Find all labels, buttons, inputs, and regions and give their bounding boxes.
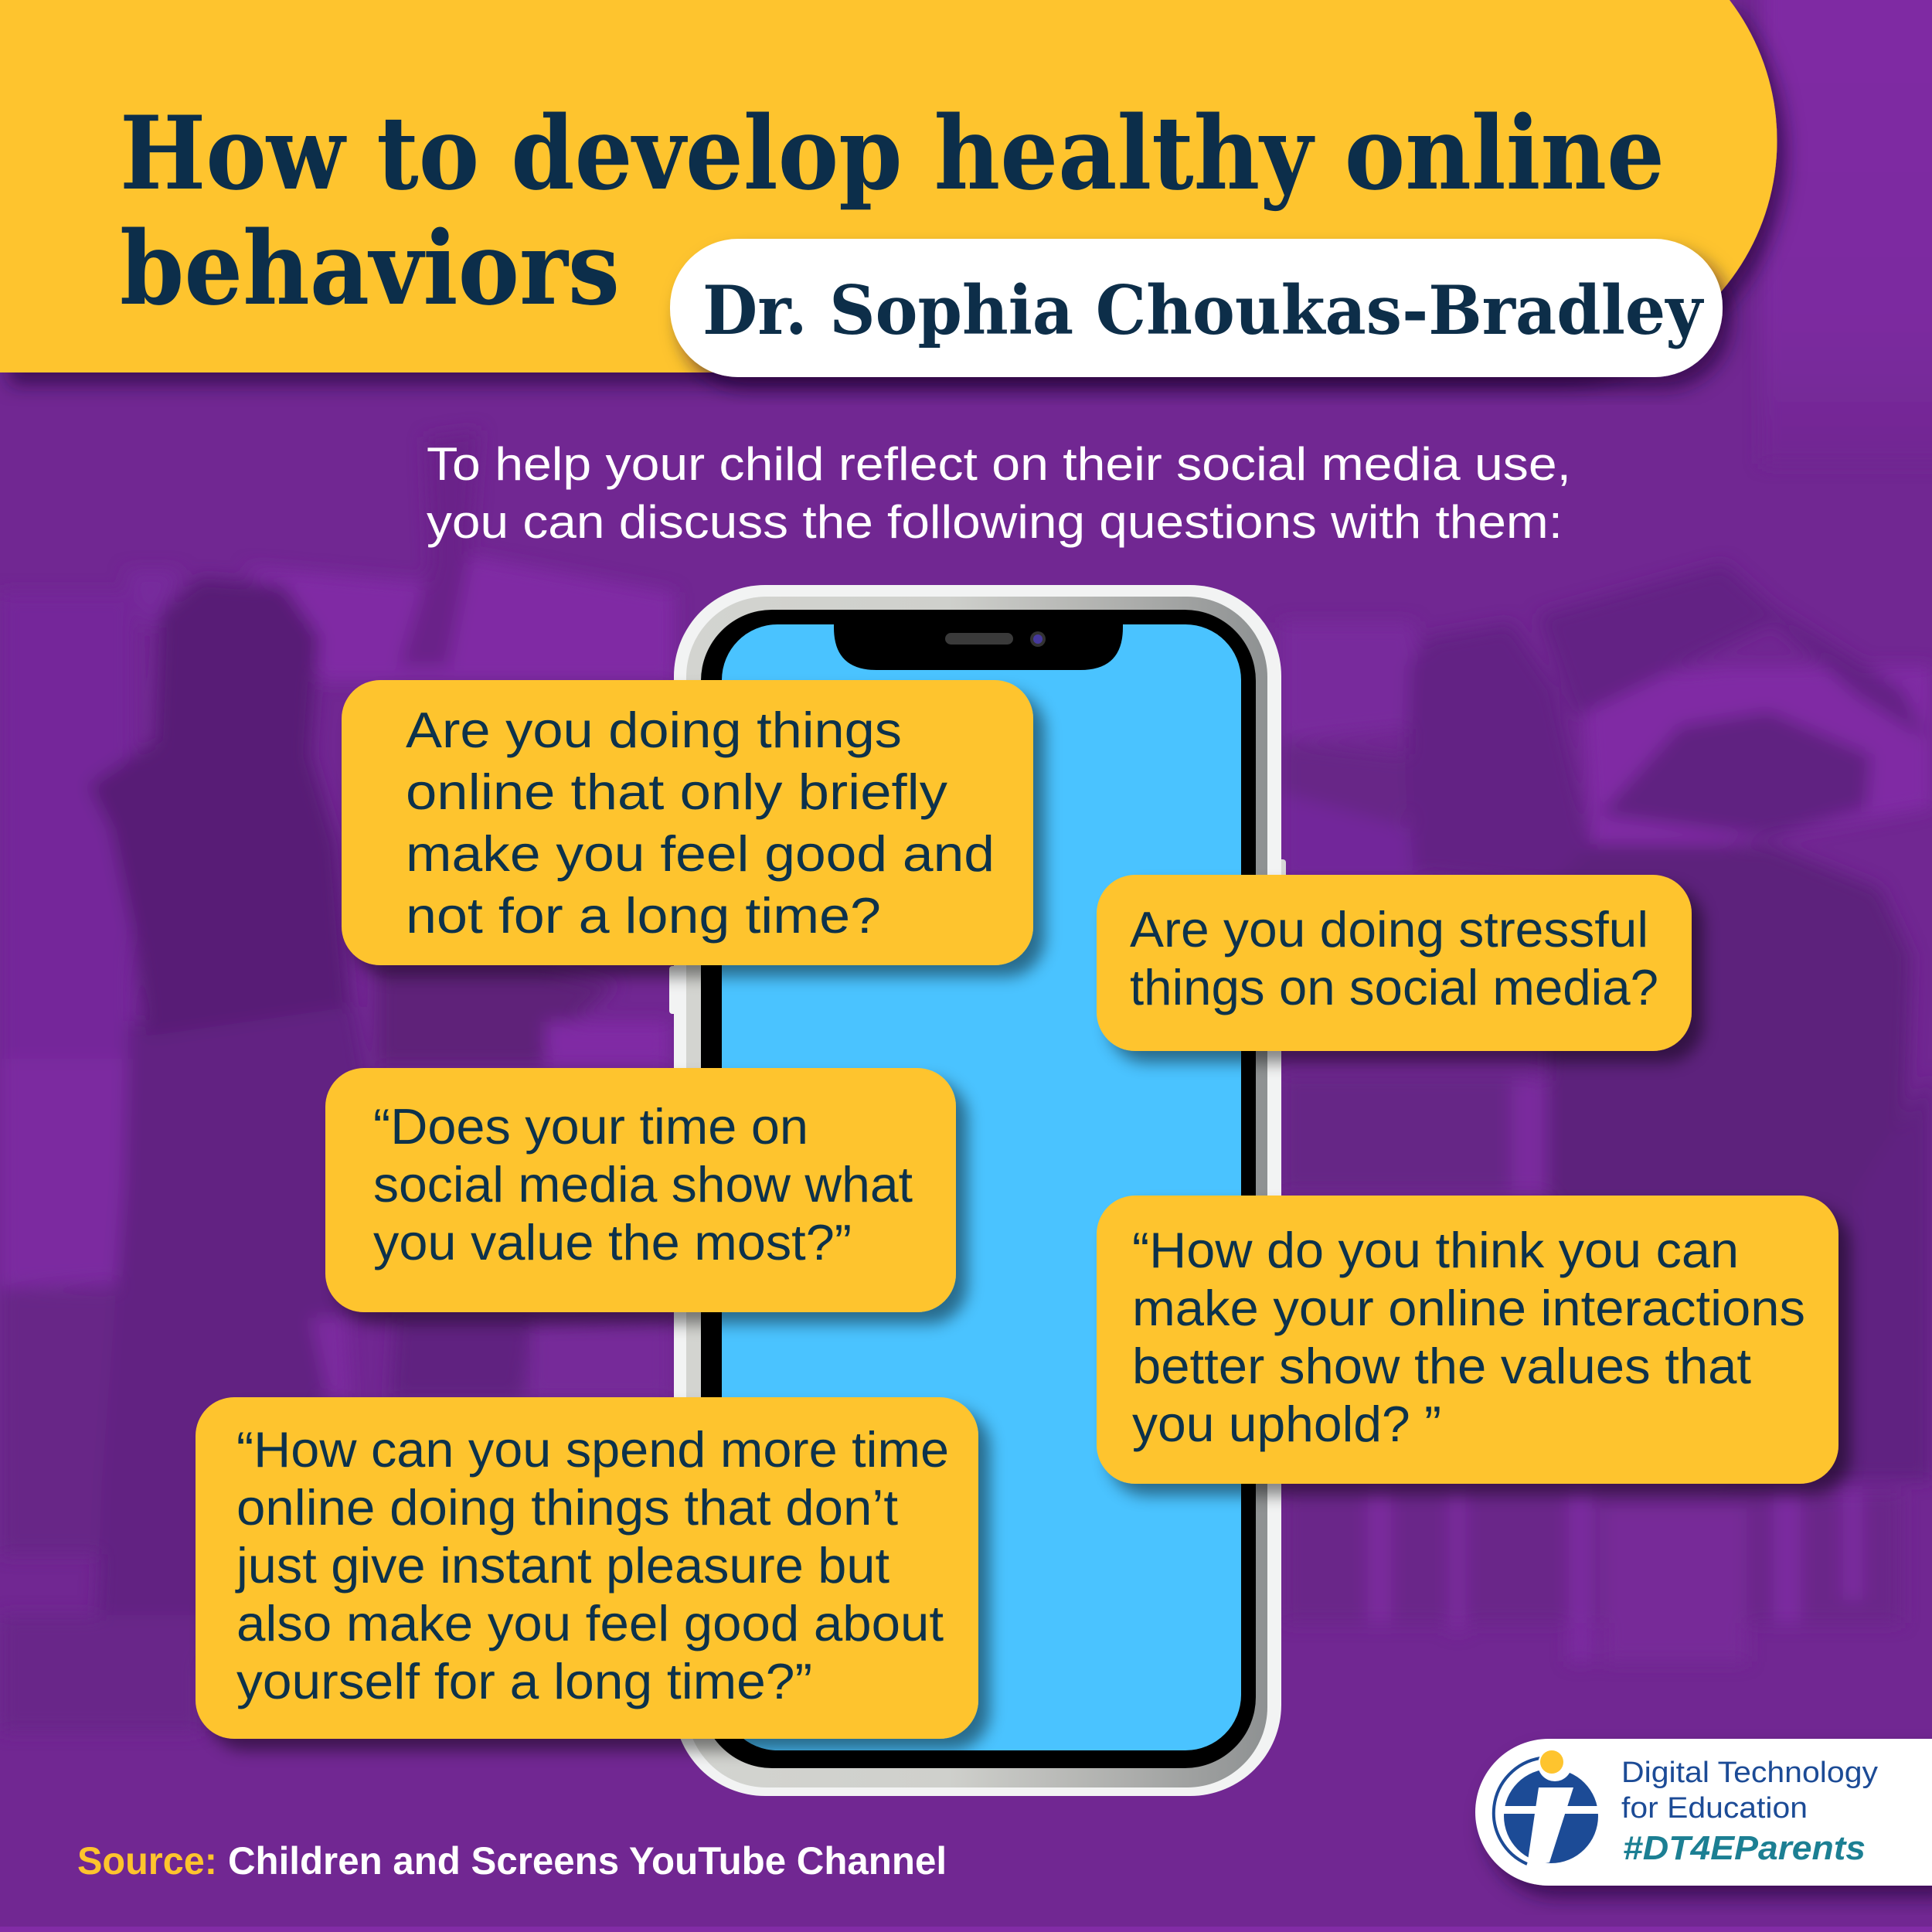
logo text: Digital Technology	[1621, 1757, 1878, 1789]
question bubble 5: yourself for a long time?”	[236, 1653, 812, 1709]
question bubble 5: just give instant pleasure but	[235, 1537, 889, 1594]
title	[120, 94, 1665, 328]
question bubble 2: things on social media?	[1130, 959, 1658, 1015]
question bubble 5: also make you feel good about	[236, 1595, 944, 1651]
question bubble 3: you value the most?”	[373, 1214, 852, 1270]
question bubble 1: online that only briefly	[406, 764, 948, 820]
question bubble 3: social media show what	[373, 1156, 913, 1213]
logo pill	[1475, 1739, 1932, 1886]
question bubble 1: not for a long time?	[406, 887, 881, 944]
speaker name pill: Dr. Sophia Choukas-Bradley	[702, 270, 1704, 350]
logo text	[1621, 1757, 1878, 1867]
icon: DT4E logo	[1494, 1747, 1604, 1866]
question bubble 1: make you feel good and	[406, 825, 995, 882]
source line: Children and Screens YouTube Channel	[228, 1839, 947, 1883]
speaker name pill	[670, 239, 1723, 377]
header: yellow rounded banner	[0, 0, 1777, 372]
logo text: for Education	[1621, 1792, 1808, 1825]
question bubble 3: “Does your time on	[373, 1098, 808, 1155]
phone notch	[834, 618, 1123, 670]
question bubble 2: Are you doing stressful	[1130, 901, 1648, 957]
intro text: you can discuss the following questions with them:	[427, 496, 1563, 548]
question bubble 4	[1097, 1196, 1838, 1484]
phone illustration	[669, 585, 1286, 1796]
question bubble 5: “How can you spend more time	[236, 1421, 949, 1478]
question bubble 5	[196, 1397, 978, 1739]
logo text: #DT4EParents	[1623, 1829, 1866, 1867]
source line: Source:	[77, 1839, 217, 1883]
phone camera	[1030, 631, 1046, 647]
question bubble 3	[325, 1068, 956, 1312]
phone screen	[722, 624, 1241, 1750]
phone speaker	[945, 633, 1013, 645]
intro text: To help your child reflect on their social media use,	[427, 438, 1571, 490]
title: behaviors	[120, 209, 620, 328]
title: How to develop healthy online	[120, 94, 1665, 213]
question bubble 1: Are you doing things	[406, 702, 902, 758]
question bubble 5: online doing things that don’t	[236, 1479, 898, 1536]
question bubble 4: better show the values that	[1132, 1338, 1751, 1394]
question bubble 4: make your online interactions	[1132, 1280, 1805, 1336]
intro text	[427, 438, 1571, 548]
question bubble 4: you uphold? ”	[1132, 1396, 1441, 1452]
question bubble 1	[342, 680, 1033, 965]
question bubble 4: “How do you think you can	[1132, 1222, 1739, 1278]
question bubble 2	[1097, 875, 1692, 1051]
